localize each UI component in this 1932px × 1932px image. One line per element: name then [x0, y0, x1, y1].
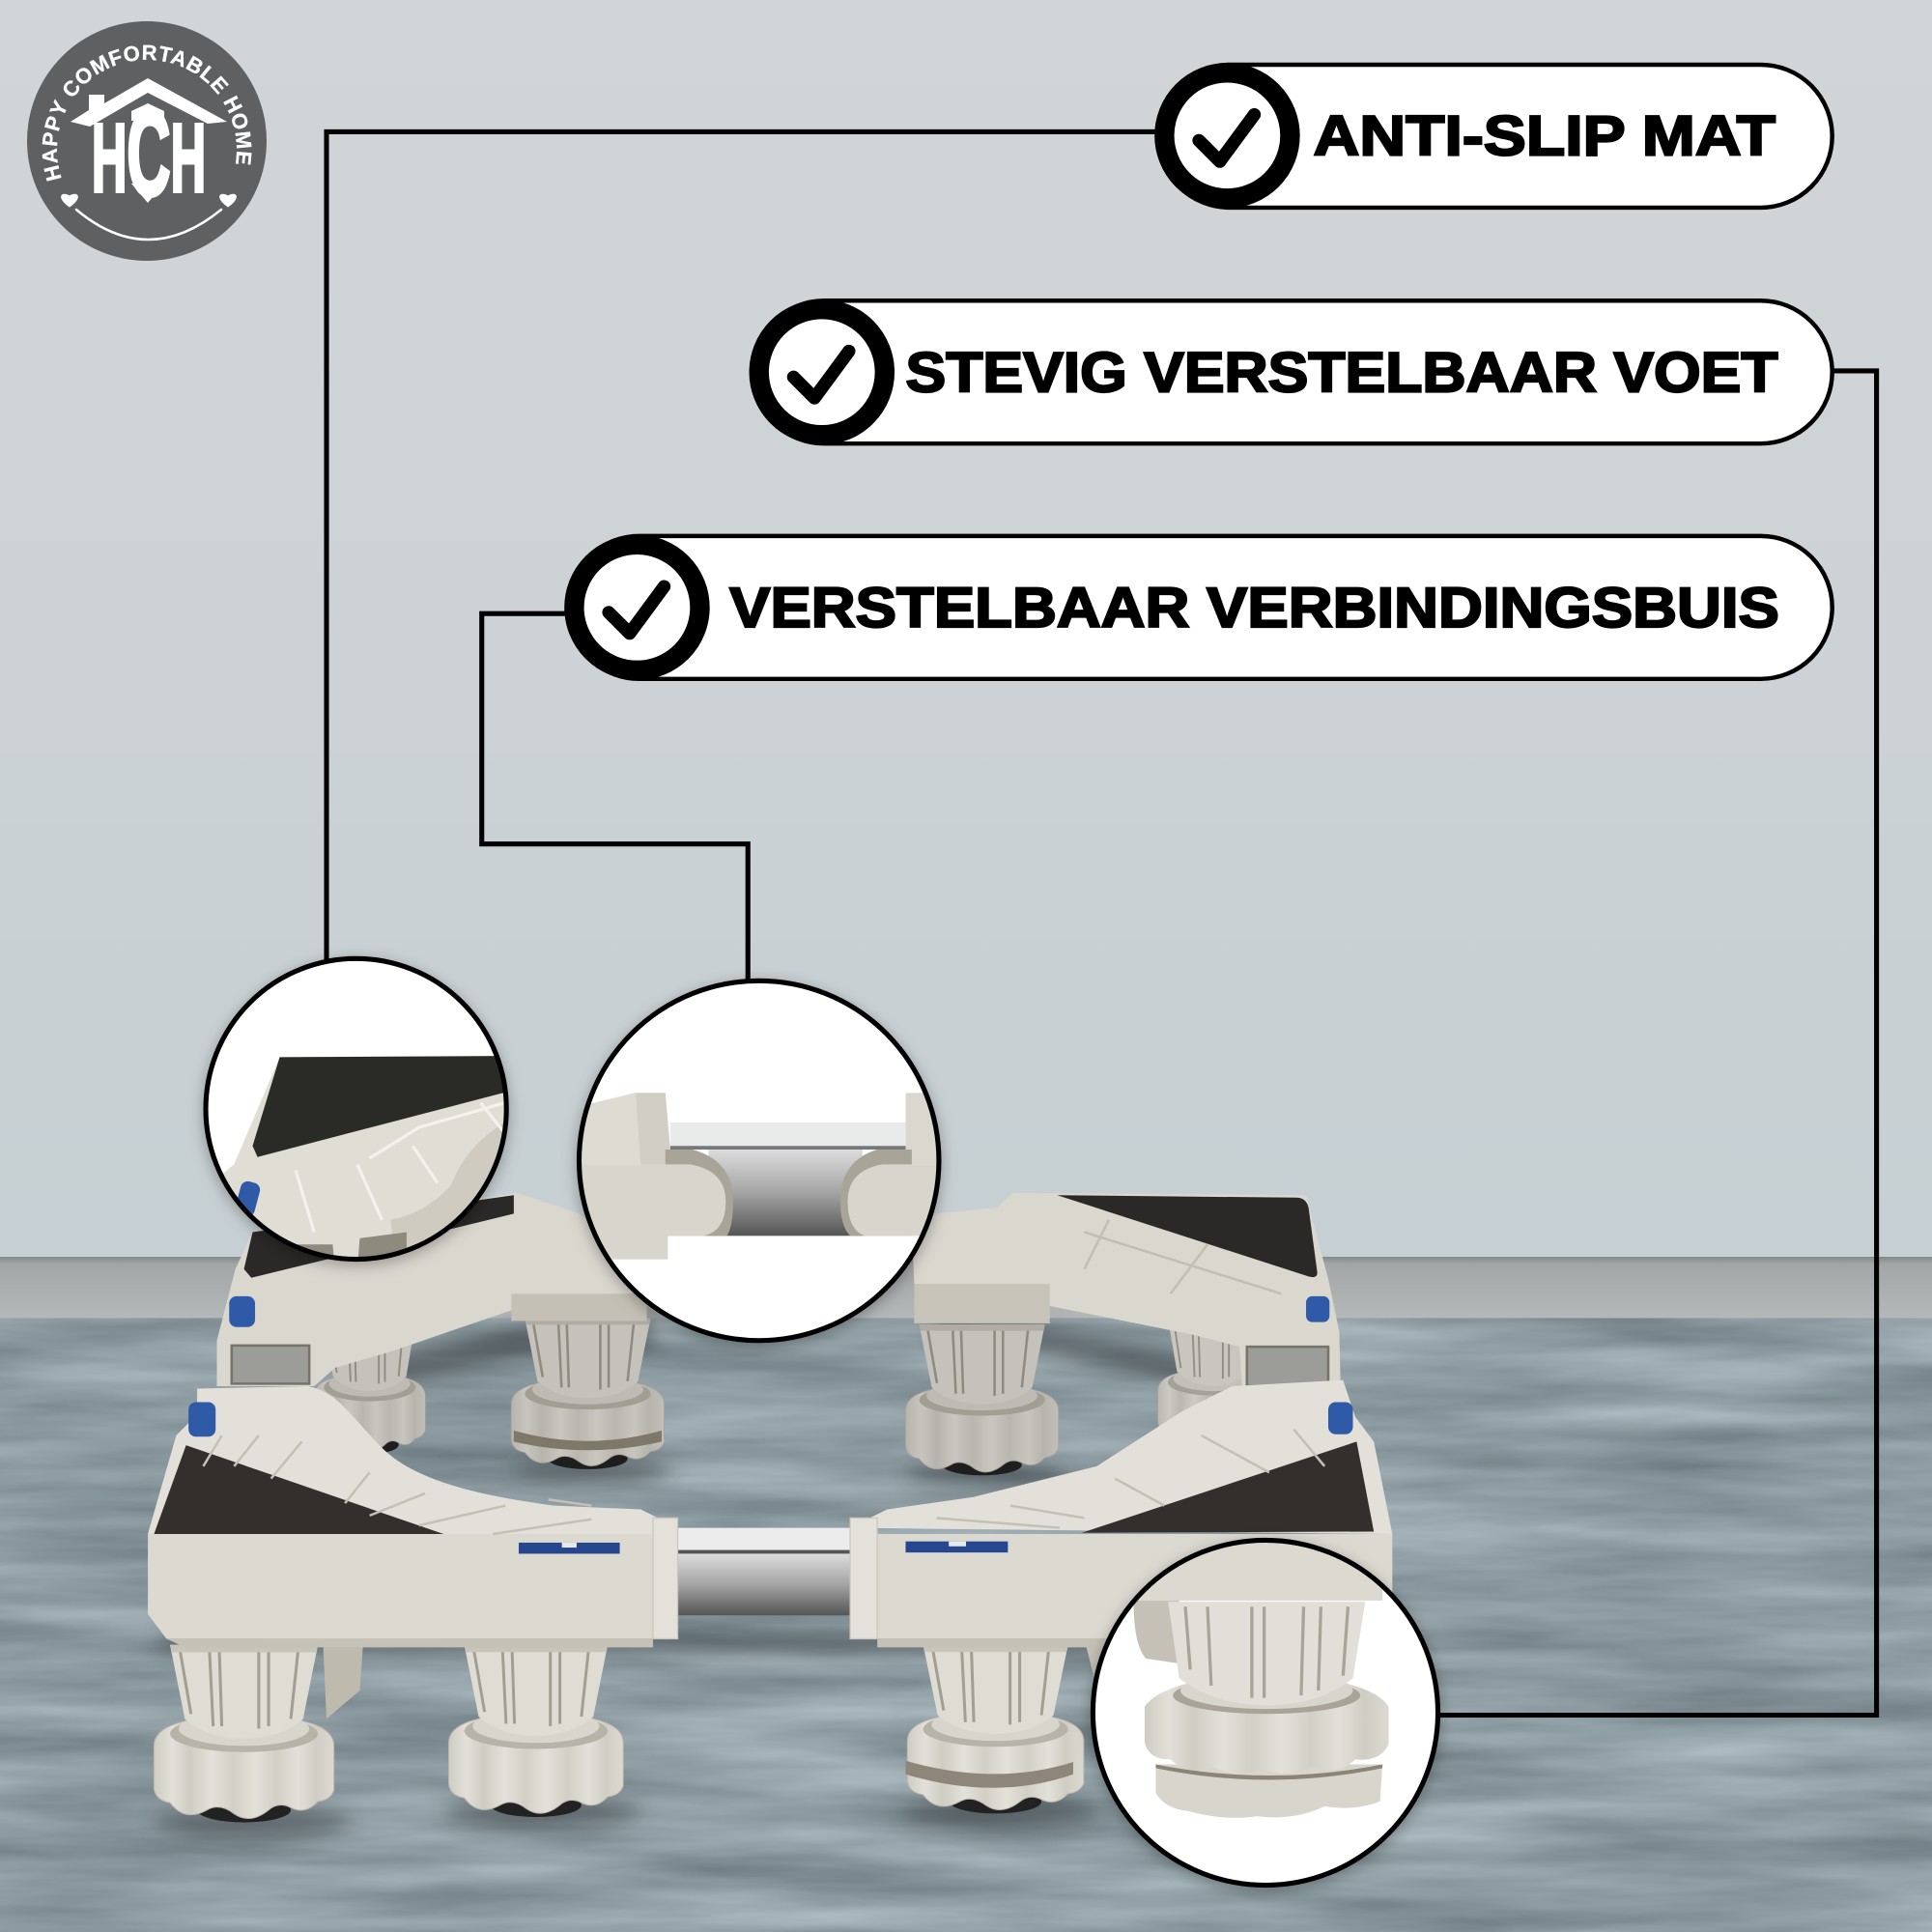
label pill: anti-slip mat: ANTI-SLIP MAT: [1314, 105, 1776, 168]
label pill: adjustable connecting tube: [568, 536, 1833, 679]
connector line: adjustable foot: [1435, 371, 1877, 1716]
far leg stub behind front left: [323, 1638, 363, 1719]
product: washing machine base: [148, 1193, 1392, 1836]
connector line: anti-slip mat: [327, 131, 1158, 963]
connecting tube: [678, 1528, 850, 1550]
back-left arm: [216, 1193, 653, 1386]
logo: Happy Comfortable Home: HAPPY COMFORTABLE HOME: [43, 44, 251, 182]
detail circle: anti-slip mat close-up: [203, 958, 518, 1269]
background: textured floor: [0, 1319, 1932, 1932]
front-right arm: [850, 1380, 1392, 1534]
detail circle: connecting tube close-up: [579, 980, 949, 1341]
back legs: [314, 1321, 425, 1454]
logo: Happy Comfortable Home: C: [127, 87, 171, 221]
front legs: [154, 1645, 334, 1822]
logo: Happy Comfortable Home: H: [92, 104, 161, 213]
label pill: anti-slip mat: [1158, 65, 1833, 208]
floor shadows: [154, 1312, 1392, 1836]
label pill: sturdy adjustable foot: STEVIG VERSTELBAAR VOET: [906, 342, 1778, 405]
front-left arm: [148, 1386, 678, 1534]
back-right arm: [912, 1193, 1341, 1386]
logo: Happy Comfortable Home: [27, 21, 267, 261]
background: skirting board: [0, 1257, 1932, 1319]
logo: Happy Comfortable Home: H: [171, 104, 206, 213]
label pill: sturdy adjustable foot: [753, 300, 1833, 443]
label pill: adjustable connecting tube: VERSTELBAAR VERBINDINGSBUIS: [729, 577, 1779, 639]
detail circle: adjustable foot close-up: [1084, 1534, 1438, 1886]
background: wall: [0, 0, 1932, 1257]
connector line: connecting tube: [482, 613, 748, 985]
